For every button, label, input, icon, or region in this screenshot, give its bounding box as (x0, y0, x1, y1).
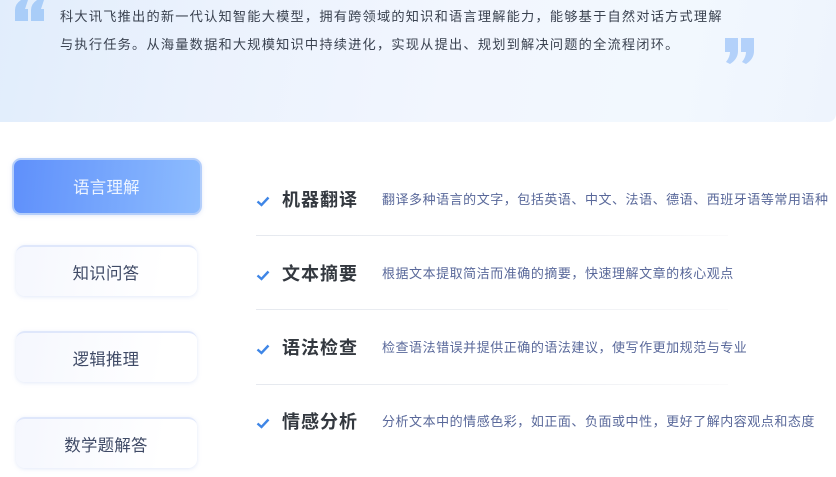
intro text line 1: 科大讯飞推出的新一代认知智能大模型，拥有跨领域的知识和语言理解能力，能够基于自然对话方式理解 (60, 9, 723, 24)
list item: 文本摘要 (256, 264, 734, 284)
button: 数学题解答 (16, 417, 197, 468)
button: 知识问答 (16, 245, 197, 296)
icon: check (256, 344, 270, 355)
panel: introduction banner (0, 0, 836, 122)
button: 逻辑推理: 逻辑推理 (73, 351, 139, 369)
title: 文本摘要 (282, 264, 358, 284)
icon: closing quotation mark (725, 38, 754, 64)
description: 根据文本提取简洁而准确的摘要，快速理解文章的核心观点 (382, 266, 734, 281)
button: 数学题解答: 数学题解答 (64, 437, 148, 455)
icon: check (256, 196, 270, 207)
icon: opening quotation mark (15, 0, 44, 21)
list item: 机器翻译 (256, 190, 828, 210)
button: 语言理解 (active) (12, 158, 202, 215)
description: 分析文本中的情感色彩，如正面、负面或中性，更好了解内容观点和态度 (382, 414, 815, 429)
list item: 语法检查 (256, 338, 747, 358)
description: 检查语法错误并提供正确的语法建议，使写作更加规范与专业 (382, 340, 747, 355)
title: 语法检查 (282, 338, 358, 358)
description: 翻译多种语言的文字，包括英语、中文、法语、德语、西班牙语等常用语种 (382, 192, 828, 207)
list item: 情感分析 (256, 412, 815, 432)
button: 语言理解 (active): 语言理解 (73, 179, 140, 197)
title: 机器翻译 (282, 190, 358, 210)
button: 逻辑推理 (16, 331, 197, 382)
icon: check (256, 418, 270, 429)
button: 知识问答: 知识问答 (73, 265, 139, 283)
intro text line 2: 与执行任务。从海量数据和大规模知识中持续进化，实现从提出、规划到解决问题的全流程闭环。 (60, 37, 680, 52)
icon: check (256, 270, 270, 281)
title: 情感分析 (282, 412, 358, 432)
